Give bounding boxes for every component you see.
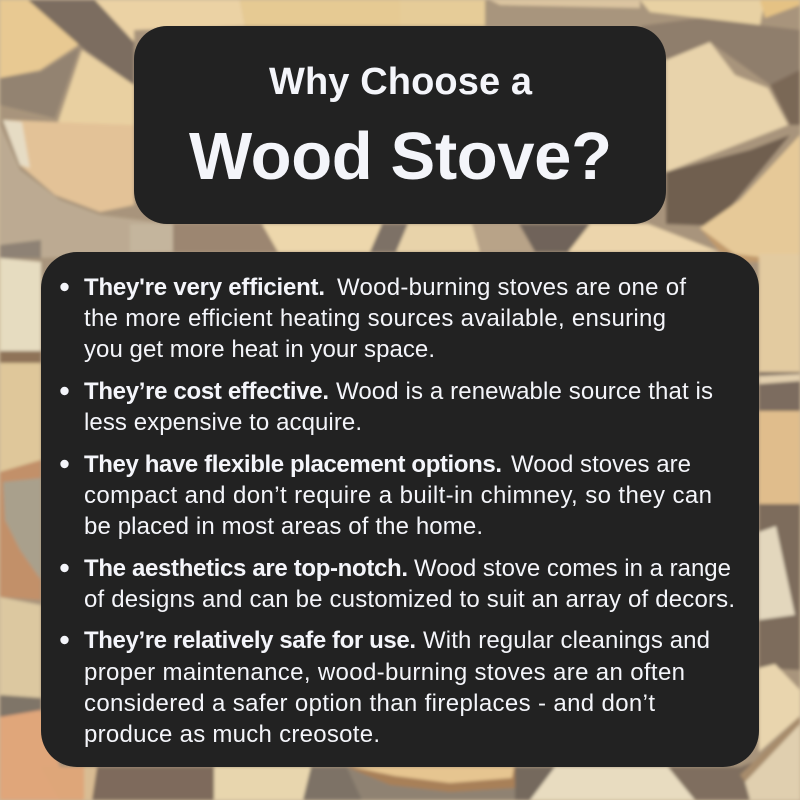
reason 4: aesthetics: of designs and can be customized to suit an array of decors.	[84, 586, 735, 613]
reason 2: cost	[60, 378, 713, 436]
reason 2: cost: They’re cost effective.	[84, 378, 329, 405]
reason 1: efficiency: They're very efficient.	[84, 274, 325, 301]
title line: Wood Stove?: Wood Stove?	[189, 119, 612, 194]
reason 4: aesthetics: The aesthetics are top-notch.	[84, 555, 408, 582]
title panel	[134, 26, 666, 224]
reason 1: efficiency: Wood-burning stoves are one of	[337, 274, 686, 301]
reason 4: aesthetics: Wood stove comes in a range	[414, 555, 731, 582]
reason 3: placement: Wood stoves are	[511, 451, 691, 478]
reason 3: placement: be placed in most areas of the home.	[84, 513, 483, 540]
reason 3: placement	[60, 451, 712, 540]
reason 3: placement: They have flexible placement options.	[84, 451, 502, 478]
reason 1: efficiency	[60, 274, 686, 363]
reason 5: safety: With regular cleanings and	[423, 627, 710, 654]
reason 3: placement: compact and don’t require a built-in chimney, so they can	[84, 482, 712, 509]
reason 2: cost: less expensive to acquire.	[84, 409, 362, 436]
reason 5: safety: proper maintenance, wood-burning stoves are an often	[84, 659, 685, 686]
reason 5: safety: They’re relatively safe for use.	[84, 627, 416, 654]
reason 5: safety: considered a safer option than fireplaces - and don’t	[84, 690, 655, 717]
reason 1: efficiency: you get more heat in your space.	[84, 336, 435, 363]
reason 5: safety: produce as much creosote.	[84, 721, 380, 748]
reason 1: efficiency: the more efficient heating sources available, ensuring	[84, 305, 666, 332]
title line: Why Choose a: Why Choose a	[269, 61, 533, 103]
reason 5: safety	[60, 627, 710, 748]
panel: reasons list	[41, 252, 759, 767]
reason 2: cost: Wood is a renewable source that is	[336, 378, 713, 405]
reason 4: aesthetics	[60, 555, 735, 613]
